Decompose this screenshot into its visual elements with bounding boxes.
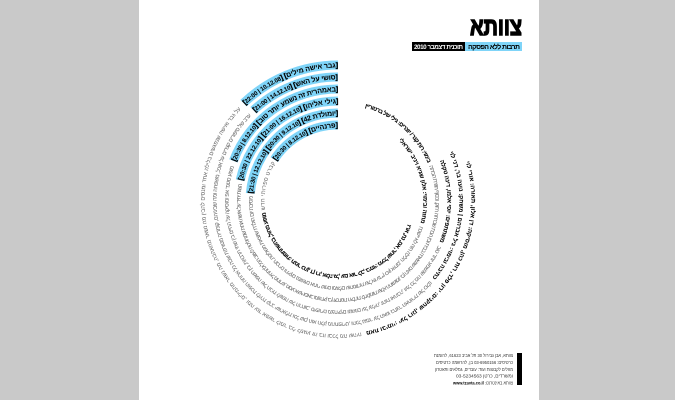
ring 5: second programme: [ סושי על האש ] [ 14.12.10 | 21:00 ]	[252, 74, 338, 114]
footer text: address and contact: מוזלים לקבוצות ועוד: עובדים, גמלאים ותאטרון	[435, 367, 513, 372]
ring 4: third programme	[225, 84, 452, 314]
ring 2: fifth programme	[246, 108, 428, 292]
ring 6: outer programme: מאת ובימוי: יעל רונן, שחקנים: ירון פלד, רות כהן, מוסיקה: דן אלון, תאורה: אורי לוי	[366, 161, 476, 335]
ring 3: fourth programme: [גילי אליהו ] [ 16.12.10 | 21:00 ] [ 22.12.10 | 20:30 ]	[238, 98, 338, 181]
footer text: address and contact: צוותא, אבן גבירול 30 תל אביב 61623, להזמנת	[434, 353, 513, 358]
ring 3: fourth programme: בימוי: רות קנר / יוצרים: גילי של ברטוריין	[365, 104, 430, 163]
ring 1: inner programme	[261, 120, 412, 280]
ring 2: fifth programme: מחזה ובימוי: אלון שגיא ויניב ישראלי	[400, 138, 428, 224]
header strip: תוכנית דצמבר 2010	[414, 44, 463, 51]
footer bar	[517, 353, 522, 385]
ring 1: inner programme: קברט ספרותי חדש	[261, 162, 275, 210]
header strip: תרבות ללא הפסקה	[468, 43, 520, 51]
ring 6: outer programme: על גבר ואישה שנפגשים בלילה אחד ומנסים להבין מה נשאר מהאהבה, מה נשאר מהמילים, ומה עוד אפשר לומר בלי לפגוע זה בזו ובכל מה שהיה	[200, 107, 362, 340]
footer text: address and contact	[434, 353, 514, 386]
ring 4: third programme: [ באמהרית זה נשמע יותר טוב ] [ 8.12.10 | 20:30 ]	[231, 86, 338, 162]
ring 4: third programme: מופע סטנד אפ ומוסיקה על החיים בין שתי תרבויות, בין השפה של הבית לשפה של הרחוב, סיפורים מצחיקים ונוגעים על עלייה, זהות ואהבה, ועל כל מה שנשמע יותר טוב	[225, 166, 441, 314]
ring 3: fourth programme	[236, 96, 439, 302]
ring 4: third programme: משתתפים: יוסי אלמו, דינה טקלה	[440, 160, 452, 242]
footer text: address and contact: כרטיסים: 03-6950156 בן, להרשמה כרטיסים	[436, 360, 514, 365]
footer text: address and contact: צוותא באינטרנט: www.tzavta.co.il	[452, 380, 513, 386]
ring 1: inner programme: מופע מחול, בהשתתפות: תמר כהן, דן רז, אלה גל, עם אור לב, בימוי: מיכל שחר, אם, נח, ארז	[262, 212, 412, 280]
header strip	[412, 42, 522, 51]
ring 6: outer programme	[200, 60, 476, 340]
ring 5: second programme: ערב של סיפורים קצרים על אוכל, משפחה ומה שביניהם, קומדיה מטורפת שבה כל ארוחה הופכת לזירת קרב ישראלית וכל שכן הוא חלק מהתפריט, והכל נגמר על האש בחצר האחורית של כולנו	[213, 114, 432, 326]
ring 6: outer programme: [ גבר אישה מילים ] [ 10.12.08 | 22:00 ]	[242, 62, 338, 106]
ring 2: fifth programme: מסיבת יום הולדת שיוצאת משליטה, חברים ותיקים נפגשים אחרי שנים ומגלים שהסודות של אז עדיין כאן איתם, הלילה הזה לא יישכח	[249, 196, 423, 292]
ring 2: fifth programme: [ יומולדת 42 ] [ 9.12.10 | 20:30 ] [ 12.12.10 | 21:30 ]	[248, 110, 338, 194]
logo: tzavta: צוותא	[470, 13, 522, 41]
ring 5: second programme: כתיבה ובימוי: גיל אברהם | משחק: נועה בר, דני לוי	[433, 151, 464, 280]
white page	[139, 0, 539, 400]
footer text: address and contact: ומשרדים, כרטן 03-5234563	[456, 374, 513, 378]
ring 3: fourth programme: הצגת יחיד על אישה אחת שמחליטה לעזוב הכל ולהתחיל מחדש, מסע אישי וכואב ומצחיק בין זיכרונות הילדות לחלומות שלא התגשמו, בין האם שנשארה בבית ובין הבת שברחה רחוק, ובסוף חוזרת הביתה	[236, 165, 439, 302]
ring 1: inner programme: [פרנהיים] [ 8.12.10 | 20:30 ]	[272, 122, 338, 162]
